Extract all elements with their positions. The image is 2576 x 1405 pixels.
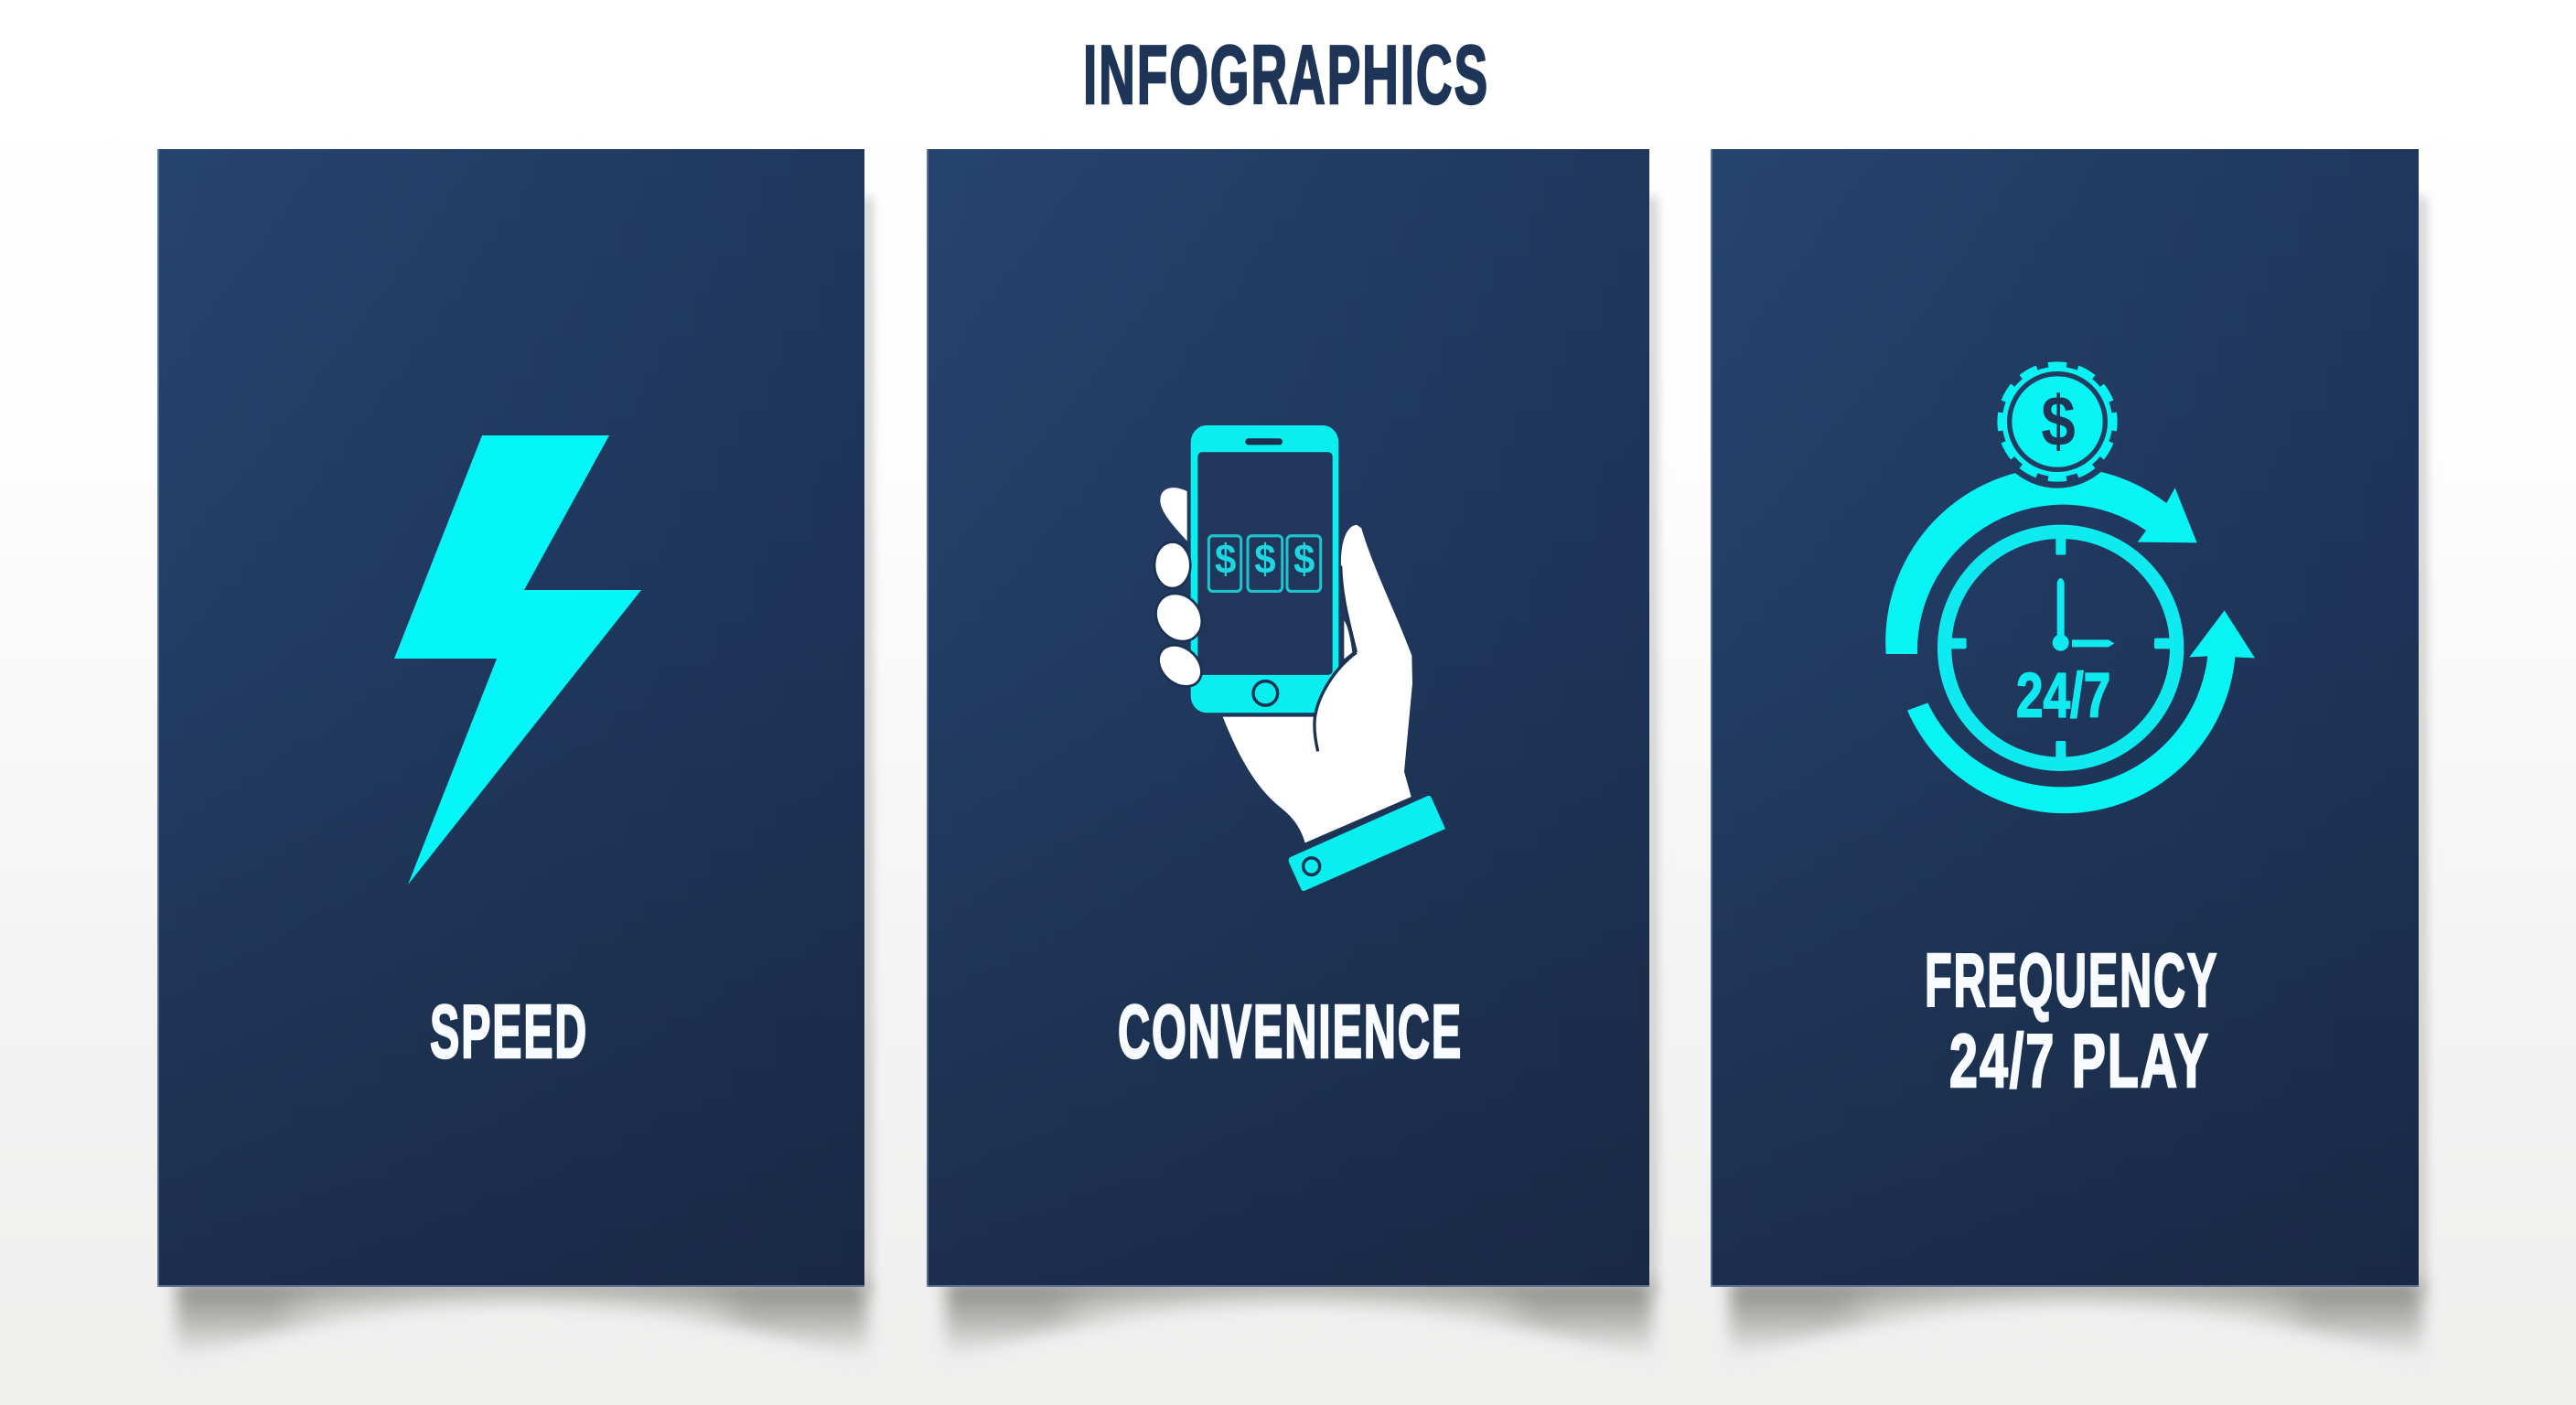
upper circular arrow bbox=[1885, 467, 2197, 654]
card background bbox=[927, 149, 1649, 1287]
gear coin bbox=[1991, 355, 2124, 488]
fingers bbox=[1147, 488, 1211, 695]
phone body bbox=[1191, 425, 1338, 713]
slot reels with dollar signs: $ bbox=[1293, 537, 1315, 583]
card background bbox=[157, 149, 864, 1287]
clock: 24/7 bbox=[2016, 660, 2110, 730]
clock bbox=[1945, 531, 2177, 764]
label: speed: SPEED bbox=[430, 989, 588, 1074]
gear coin: $ bbox=[2041, 381, 2076, 461]
card shadow bbox=[177, 197, 871, 1361]
label: 24/7 play: 24/7 PLAY bbox=[1949, 1018, 2210, 1103]
thumb edge bbox=[1341, 566, 1357, 652]
label: frequency: FREQUENCY bbox=[1925, 938, 2218, 1023]
palm crease bbox=[1315, 652, 1357, 751]
slot reels with dollar signs: $ bbox=[1215, 537, 1236, 583]
panel: frequency bbox=[1711, 149, 2425, 1361]
slot reels with dollar signs: $ bbox=[1254, 537, 1276, 583]
palm and thumb bbox=[1223, 525, 1412, 842]
panel: speed bbox=[157, 149, 871, 1361]
shirt cuff bbox=[1289, 796, 1445, 891]
slot reels with dollar signs bbox=[1208, 536, 1321, 591]
card background bbox=[1711, 149, 2419, 1287]
icon: hand holding phone bbox=[1147, 425, 1445, 891]
card shadow bbox=[1730, 197, 2425, 1361]
lower circular arrow bbox=[1907, 610, 2255, 813]
sliver between thumb and phone bbox=[1344, 621, 1352, 659]
label: convenience: CONVENIENCE bbox=[1118, 989, 1463, 1074]
panel: convenience bbox=[927, 149, 1656, 1361]
icon: 24/7 clock with coin and arrows bbox=[1885, 355, 2255, 813]
card shadow bbox=[946, 197, 1656, 1361]
title: INFOGRAPHICS bbox=[1083, 29, 1489, 122]
icon: lightning bolt bbox=[394, 435, 641, 885]
